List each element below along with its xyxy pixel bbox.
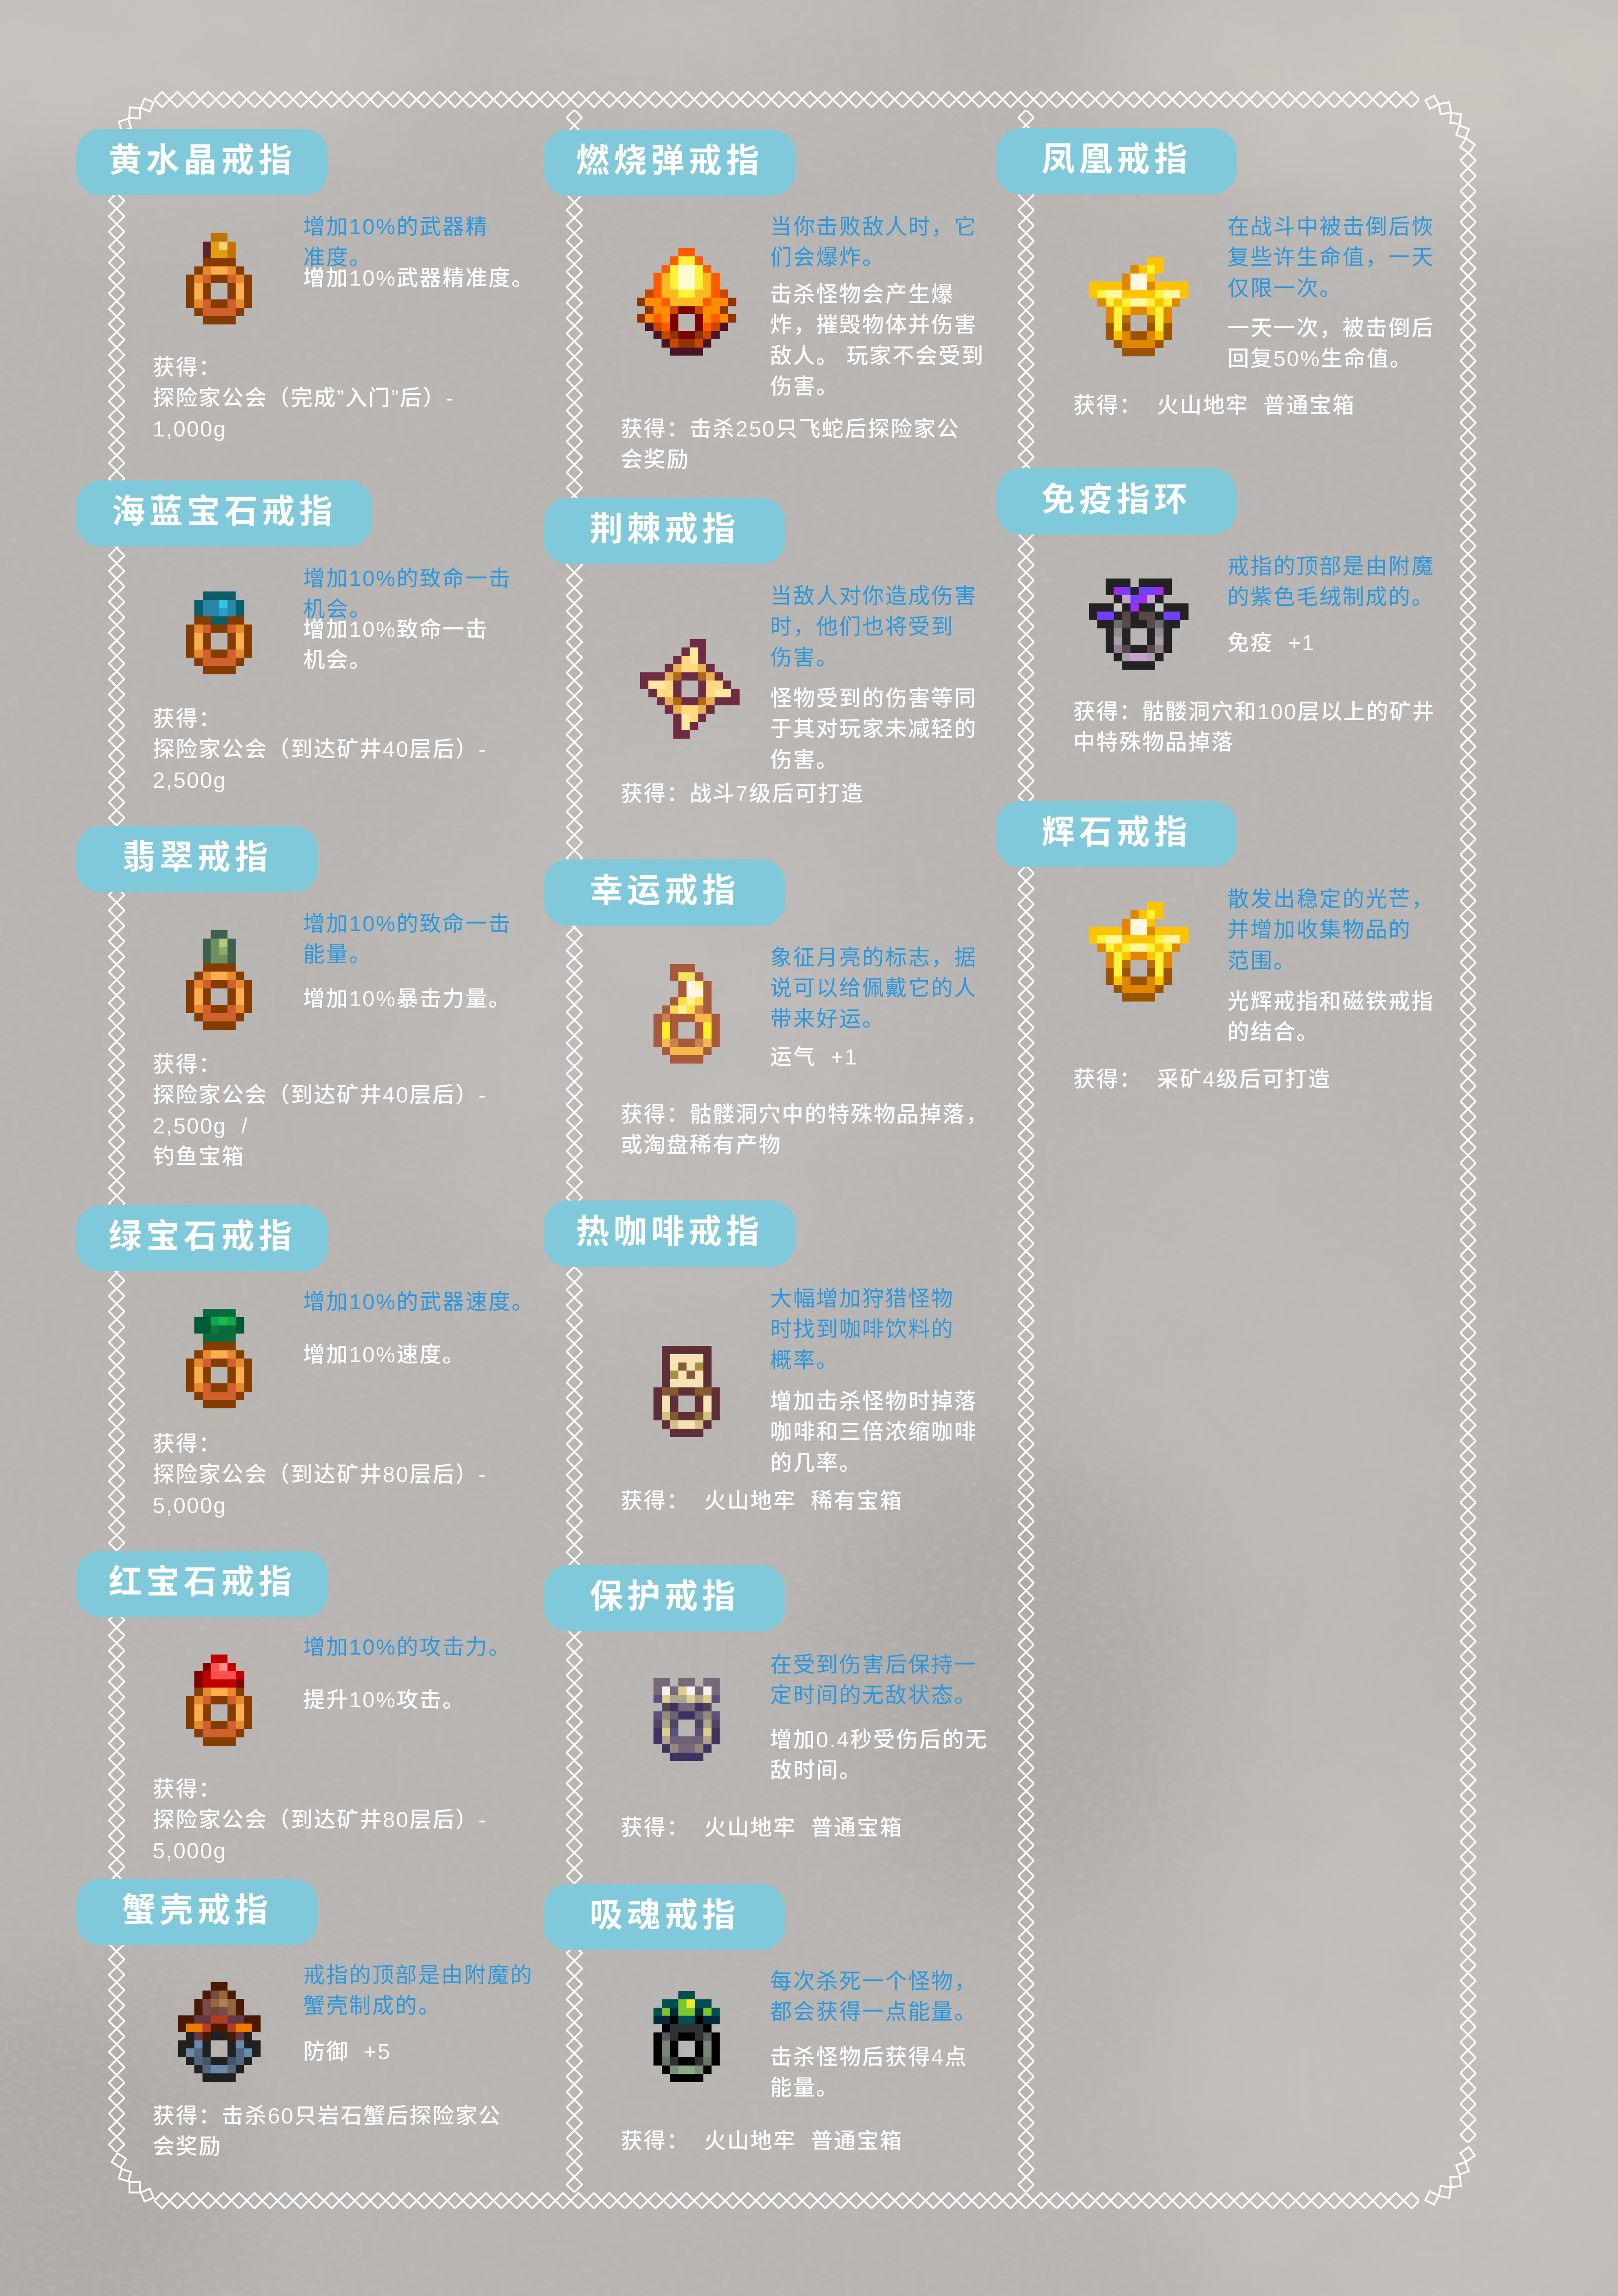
heading: 幸运戒指 xyxy=(590,872,740,909)
effect text (white): 提升10%攻击。 xyxy=(303,1687,466,1712)
how to obtain: 获得： xyxy=(153,1431,222,1456)
effect text (blue): 当你击败敌人时，它 xyxy=(770,214,977,239)
effect text (blue): 增加10%的武器精 xyxy=(303,214,488,239)
heading xyxy=(544,498,785,564)
effect text (white) xyxy=(770,279,984,402)
effect text (blue): 范围。 xyxy=(1227,948,1296,973)
how to obtain: 会奖励 xyxy=(153,2134,222,2159)
effect text (blue) xyxy=(1227,212,1434,304)
panel: hot java ring xyxy=(544,1201,1007,1516)
effect text (white): 敌人。 玩家不会受到 xyxy=(770,343,984,368)
how to obtain: 会奖励 xyxy=(621,447,690,472)
icon: jade ring xyxy=(186,930,252,1030)
how to obtain xyxy=(153,1429,487,1521)
effect text (blue): 戒指的顶部是由附魔 xyxy=(1227,554,1434,579)
effect text (blue): 的紫色毛绒制成的。 xyxy=(1227,585,1434,609)
heading: 蟹壳戒指 xyxy=(122,1892,272,1929)
how to obtain: 钓鱼宝箱 xyxy=(153,1144,245,1169)
heading: 辉石戒指 xyxy=(1041,814,1191,851)
how to obtain: 探险家公会（到达矿井40层后）- xyxy=(153,1083,487,1107)
effect text (blue): 当敌人对你造成伤害 xyxy=(770,584,977,608)
effect text (blue): 散发出稳定的光芒， xyxy=(1227,887,1434,911)
effect text (blue) xyxy=(770,1283,954,1375)
effect text (white): 怪物受到的伤害等同 xyxy=(770,686,977,710)
effect text (blue) xyxy=(770,1966,977,2028)
how to obtain: 1,000g xyxy=(153,417,227,441)
icon: lucky ring xyxy=(653,964,720,1064)
panel: jade ring xyxy=(76,826,567,1172)
effect text (white) xyxy=(1227,313,1434,374)
heading xyxy=(76,826,318,892)
effect text (white): 增加0.4秒受伤后的无 xyxy=(770,1727,988,1752)
effect text (blue) xyxy=(1227,551,1434,613)
heading xyxy=(76,1205,328,1271)
effect text (white): 炸，摧毁物体并伤害 xyxy=(770,312,977,337)
effect text (white): 增加10%速度。 xyxy=(303,1342,466,1367)
effect text (white) xyxy=(770,683,977,775)
heading xyxy=(996,468,1237,535)
effect text (white): 机会。 xyxy=(303,647,372,672)
heading xyxy=(544,1565,785,1631)
effect text (white): 于其对玩家未减轻的 xyxy=(770,716,977,741)
heading xyxy=(76,1551,328,1617)
how to obtain: 获得： 火山地牢 稀有宝箱 xyxy=(621,1488,903,1513)
how to obtain: 获得：击杀60只岩石蟹后探险家公 xyxy=(153,2103,501,2128)
effect text (white): 防御 +5 xyxy=(303,2039,391,2064)
how to obtain: 获得：骷髅洞穴和100层以上的矿井 xyxy=(1073,699,1435,724)
how to obtain: 获得：击杀250只飞蛇后探险家公 xyxy=(621,417,960,441)
effect text (blue): 并增加收集物品的 xyxy=(1227,917,1412,942)
effect text (white): 伤害。 xyxy=(770,374,839,398)
heading xyxy=(544,1201,796,1267)
effect text (blue): 们会爆炸。 xyxy=(770,245,885,269)
panel: glowstone ring xyxy=(996,801,1459,1095)
panel: lucky ring xyxy=(544,859,1007,1160)
heading: 翡翠戒指 xyxy=(122,839,272,876)
how to obtain xyxy=(1073,697,1435,758)
heading xyxy=(76,129,328,195)
how to obtain: 获得： xyxy=(153,706,222,731)
effect text (blue): 蟹壳制成的。 xyxy=(303,1993,441,2018)
effect text (blue): 在战斗中被击倒后恢 xyxy=(1227,214,1434,239)
effect text (blue) xyxy=(770,212,977,273)
heading xyxy=(76,480,372,547)
effect text (white): 的结合。 xyxy=(1227,1020,1319,1044)
effect text (blue): 都会获得一点能量。 xyxy=(770,1999,977,2024)
panel: napalm ring xyxy=(544,130,1007,475)
how to obtain: 获得：骷髅洞穴中的特殊物品掉落， xyxy=(621,1102,989,1126)
panel: emerald ring xyxy=(76,1205,567,1521)
how to obtain xyxy=(153,1774,487,1866)
effect text (white): 增加10%暴击力量。 xyxy=(303,986,511,1011)
panel: crabshell ring xyxy=(76,1879,567,2162)
how to obtain: 获得： xyxy=(153,1052,222,1076)
effect text (white): 的几率。 xyxy=(770,1450,862,1475)
heading: 海蓝宝石戒指 xyxy=(112,493,337,530)
effect text (blue): 说可以给佩戴它的人 xyxy=(770,976,977,1000)
effect text (blue) xyxy=(770,1649,977,1711)
how to obtain xyxy=(621,414,960,475)
effect text (blue): 时找到咖啡饮料的 xyxy=(770,1317,954,1341)
how to obtain: 5,000g xyxy=(153,1838,227,1863)
effect text (white) xyxy=(770,2042,967,2103)
how to obtain: 5,000g xyxy=(153,1493,227,1518)
effect text (white): 咖啡和三倍浓缩咖啡 xyxy=(770,1419,977,1444)
heading: 凤凰戒指 xyxy=(1041,141,1191,178)
effect text (blue): 伤害。 xyxy=(770,645,839,670)
heading: 荆棘戒指 xyxy=(590,511,740,548)
effect text (blue) xyxy=(303,1960,533,2022)
icon: glowstone ring xyxy=(1089,902,1189,1002)
effect text (white) xyxy=(1227,986,1434,1048)
heading: 保护戒指 xyxy=(590,1578,740,1615)
heading: 免疫指环 xyxy=(1041,481,1191,518)
effect text (white): 增加10%武器精准度。 xyxy=(303,266,535,290)
effect text (blue): 象征月亮的标志，据 xyxy=(770,945,977,970)
how to obtain: 获得： 火山地牢 普通宝箱 xyxy=(621,1815,903,1840)
icon: phoenix ring xyxy=(1089,257,1189,356)
effect text (white) xyxy=(770,1386,977,1478)
how to obtain: 探险家公会（完成”入门”后）- xyxy=(153,386,454,410)
icon: immunity band xyxy=(1089,579,1189,670)
how to obtain: 获得：战斗7级后可打造 xyxy=(621,781,864,806)
effect text (blue): 复些许生命值，一天 xyxy=(1227,245,1434,269)
effect text (white): 增加10%致命一击 xyxy=(303,617,488,641)
heading: 热咖啡戒指 xyxy=(576,1213,764,1251)
how to obtain: 获得： xyxy=(153,1777,222,1801)
how to obtain: 中特殊物品掉落 xyxy=(1073,730,1234,754)
icon: hot java ring xyxy=(653,1346,720,1437)
heading: 吸魂戒指 xyxy=(590,1897,740,1934)
effect text (blue): 增加10%的攻击力。 xyxy=(303,1635,511,1659)
effect text (white): 击杀怪物会产生爆 xyxy=(770,282,954,306)
effect text (white): 光辉戒指和磁铁戒指 xyxy=(1227,989,1434,1014)
how to obtain xyxy=(621,1099,989,1161)
icon: crabshell ring xyxy=(178,1982,261,2082)
icon: protection ring xyxy=(653,1678,720,1761)
effect text (blue): 增加10%的武器速度。 xyxy=(303,1289,535,1314)
heading xyxy=(996,801,1237,867)
effect text (blue): 增加10%的致命一击 xyxy=(303,911,511,936)
panel: aquamarine ring xyxy=(76,480,567,796)
how to obtain xyxy=(153,352,454,444)
effect text (white): 一天一次，被击倒后 xyxy=(1227,316,1434,340)
how to obtain xyxy=(153,703,487,796)
heading: 燃烧弹戒指 xyxy=(576,143,764,180)
panel: thorns ring xyxy=(544,498,1007,809)
panel: phoenix ring xyxy=(996,128,1459,415)
effect text (white) xyxy=(303,614,488,676)
icon: topaz ring xyxy=(186,233,252,324)
panel: protection ring xyxy=(544,1565,1007,1843)
effect text (blue): 准度。 xyxy=(303,245,372,269)
heading xyxy=(544,1884,785,1950)
effect text (blue) xyxy=(770,581,977,673)
heading xyxy=(76,1879,318,1945)
panel: topaz ring xyxy=(76,129,567,448)
how to obtain: 2,500g xyxy=(153,768,227,792)
heading xyxy=(996,128,1237,194)
effect text (white): 增加击杀怪物时掉落 xyxy=(770,1389,977,1413)
heading: 黄水晶戒指 xyxy=(108,142,296,179)
how to obtain xyxy=(153,2101,501,2162)
how to obtain: 探险家公会（到达矿井40层后）- xyxy=(153,737,487,761)
how to obtain: 获得： 火山地牢 普通宝箱 xyxy=(1073,393,1356,417)
effect text (blue): 定时间的无敌状态。 xyxy=(770,1683,977,1707)
effect text (blue) xyxy=(303,212,488,273)
effect text (white): 免疫 +1 xyxy=(1227,630,1315,655)
effect text (white) xyxy=(770,1724,988,1786)
panel: ruby ring xyxy=(76,1551,567,1867)
effect text (blue): 每次杀死一个怪物， xyxy=(770,1969,977,1993)
how to obtain: 获得： xyxy=(153,355,222,380)
effect text (blue): 能量。 xyxy=(303,942,372,966)
effect text (blue) xyxy=(770,942,977,1034)
effect text (blue): 在受到伤害后保持一 xyxy=(770,1652,977,1677)
heading xyxy=(544,859,785,926)
icon: napalm ring xyxy=(637,248,736,356)
how to obtain: 获得： 采矿4级后可打造 xyxy=(1073,1067,1331,1091)
icon: emerald ring xyxy=(186,1309,252,1408)
how to obtain: 探险家公会（到达矿井80层后）- xyxy=(153,1807,487,1832)
icon: aquamarine ring xyxy=(186,591,252,674)
heading xyxy=(544,130,796,196)
effect text (blue): 仅限一次。 xyxy=(1227,276,1342,300)
effect text (blue): 机会。 xyxy=(303,597,372,621)
effect text (blue) xyxy=(1227,884,1434,976)
how to obtain: 或淘盘稀有产物 xyxy=(621,1132,782,1157)
how to obtain: 2,500g / xyxy=(153,1114,249,1138)
effect text (blue): 大幅增加狩猎怪物 xyxy=(770,1286,954,1311)
effect text (white): 回复50%生命值。 xyxy=(1227,346,1413,371)
effect text (white): 能量。 xyxy=(770,2075,839,2100)
effect text (blue): 时，他们也将受到 xyxy=(770,614,954,639)
effect text (blue) xyxy=(303,908,511,970)
effect text (white): 敌时间。 xyxy=(770,1758,862,1782)
icon: soul sapper ring xyxy=(653,1991,720,2082)
icon: ruby ring xyxy=(186,1655,252,1746)
effect text (blue): 增加10%的致命一击 xyxy=(303,566,511,591)
how to obtain: 探险家公会（到达矿井80层后）- xyxy=(153,1462,487,1487)
panel: soul sapper ring xyxy=(544,1884,1007,2156)
effect text (blue): 带来好运。 xyxy=(770,1007,885,1031)
effect text (white): 伤害。 xyxy=(770,747,839,772)
effect text (blue): 概率。 xyxy=(770,1348,839,1372)
icon: thorns ring xyxy=(640,639,740,739)
how to obtain xyxy=(153,1049,487,1172)
effect text (white): 击杀怪物后获得4点 xyxy=(770,2045,967,2069)
heading: 绿宝石戒指 xyxy=(108,1218,296,1255)
effect text (blue): 戒指的顶部是由附魔的 xyxy=(303,1963,533,1987)
effect text (blue) xyxy=(303,563,511,625)
heading: 红宝石戒指 xyxy=(108,1564,296,1601)
how to obtain: 获得： 火山地牢 普通宝箱 xyxy=(621,2128,903,2153)
panel: immunity band xyxy=(996,468,1459,758)
effect text (white): 运气 +1 xyxy=(770,1045,858,1069)
